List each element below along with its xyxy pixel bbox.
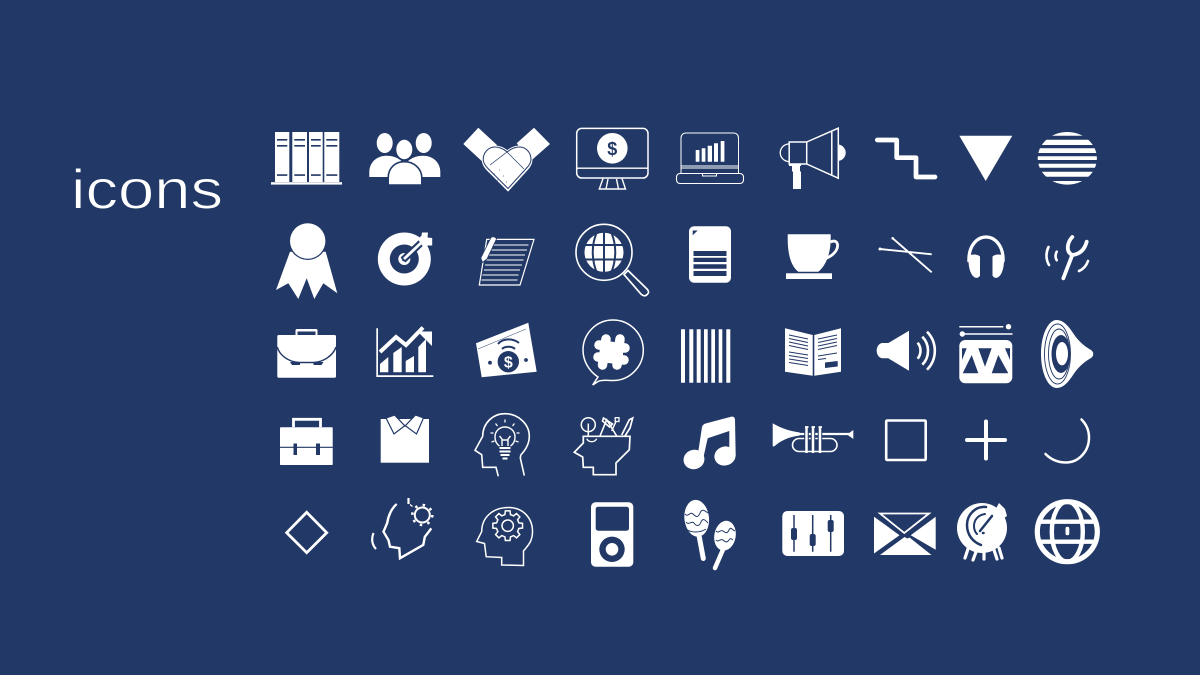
icon: money bills: $ bbox=[504, 354, 513, 372]
icon: head with sun gear bbox=[372, 498, 432, 558]
icon: document with pen bbox=[479, 237, 534, 285]
icon: vertical bars bbox=[681, 329, 730, 383]
icon: drum bbox=[959, 324, 1012, 383]
icon: monitor with dollar: $ bbox=[607, 139, 617, 159]
icon: stair line bbox=[877, 140, 935, 177]
icon: drumsticks bbox=[878, 237, 932, 272]
icon: side speaker bbox=[1041, 320, 1093, 388]
icon: down triangle bbox=[959, 136, 1012, 181]
icon: music player bbox=[591, 502, 633, 567]
icon: megaphone bbox=[780, 128, 846, 189]
icon: money bills bbox=[476, 323, 537, 377]
icon: growth chart bbox=[376, 328, 433, 377]
icon: books bbox=[271, 132, 342, 185]
icon: music notes bbox=[681, 417, 738, 472]
icon: tuning fork bbox=[1046, 237, 1088, 278]
icon: mixer sliders bbox=[782, 511, 844, 556]
icon: chat bubble hash bbox=[583, 320, 643, 385]
icon: monitor with dollar bbox=[577, 128, 648, 189]
icon: striped circle bbox=[1036, 132, 1098, 185]
icon: open book bbox=[785, 328, 841, 376]
icon: speaker with waves bbox=[877, 331, 935, 371]
icon: plus bbox=[967, 422, 1005, 458]
icon: toolcase bbox=[280, 419, 333, 465]
icon: arc bbox=[1046, 420, 1089, 462]
icon: ribbon badge bbox=[276, 222, 337, 299]
icon: head with light bulb bbox=[475, 414, 529, 476]
icon: target with arrow bbox=[378, 232, 432, 286]
icon: globe with lock bbox=[1037, 502, 1097, 562]
icon: head with gear bbox=[477, 508, 532, 566]
icon: headphones bbox=[968, 237, 1004, 278]
icon: ornate target bbox=[957, 503, 1007, 560]
icon: square outline bbox=[886, 420, 926, 460]
icon: head with tools bbox=[574, 418, 633, 475]
icon: envelope bbox=[874, 514, 936, 555]
icon: folded shirt bbox=[381, 415, 429, 463]
icon: globe magnifier bbox=[576, 224, 649, 296]
title: icons bbox=[71, 158, 223, 220]
icon: people group bbox=[369, 133, 440, 185]
icon: maracas bbox=[683, 499, 738, 568]
icon: diamond outline bbox=[287, 512, 327, 553]
icon: coffee cup bbox=[786, 234, 838, 279]
icon: handshake heart bbox=[463, 128, 550, 190]
icon: trumpet bbox=[773, 423, 853, 453]
icon: briefcase rounded bbox=[277, 329, 336, 378]
icon: laptop with bar chart bbox=[676, 133, 744, 184]
icon: document page bbox=[689, 226, 731, 283]
